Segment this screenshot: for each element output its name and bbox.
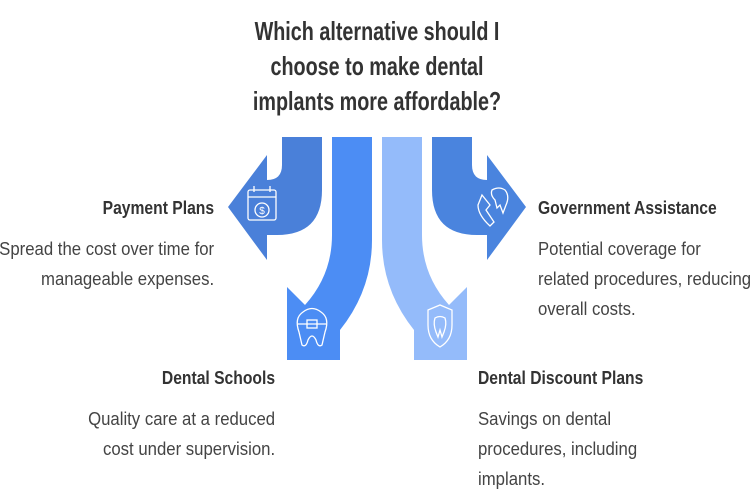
icon: calendar dollar: $ [259, 206, 265, 217]
icon: tooth shield [428, 305, 452, 347]
title [253, 16, 501, 116]
label: payment plans: Payment Plans [103, 198, 214, 218]
text: dental discount plans [478, 409, 637, 489]
title: Which alternative should I [255, 16, 499, 46]
text: payment plans: Spread the cost over time for [0, 239, 214, 259]
title: implants more affordable? [253, 86, 501, 116]
label: government assistance: Government Assistance [538, 198, 717, 218]
text: dental schools [88, 409, 275, 459]
arrow: payment plans [228, 137, 322, 260]
arrow: government assistance [432, 137, 526, 260]
text: government assistance: overall costs. [538, 299, 636, 319]
text: dental discount plans: Savings on dental [478, 409, 611, 429]
text: government assistance [538, 239, 750, 319]
text: payment plans [0, 239, 214, 289]
arrow: dental schools [287, 137, 372, 360]
label: dental schools: Dental Schools [162, 368, 275, 388]
text: government assistance: Potential coverage for [538, 239, 701, 259]
text: dental schools: cost under supervision. [103, 439, 275, 459]
icon: phone tooth [478, 188, 508, 226]
text: dental schools: Quality care at a reduced [88, 409, 275, 429]
text: dental discount plans: procedures, including [478, 439, 637, 459]
text: payment plans: manageable expenses. [41, 269, 214, 289]
label: dental discount plans: Dental Discount Plans [478, 368, 643, 388]
icon: tooth braces [297, 308, 327, 346]
text: government assistance: related procedures, reducing [538, 269, 750, 289]
title: choose to make dental [270, 51, 484, 81]
text: dental discount plans: implants. [478, 469, 545, 489]
arrow: dental discount plans [382, 137, 467, 360]
